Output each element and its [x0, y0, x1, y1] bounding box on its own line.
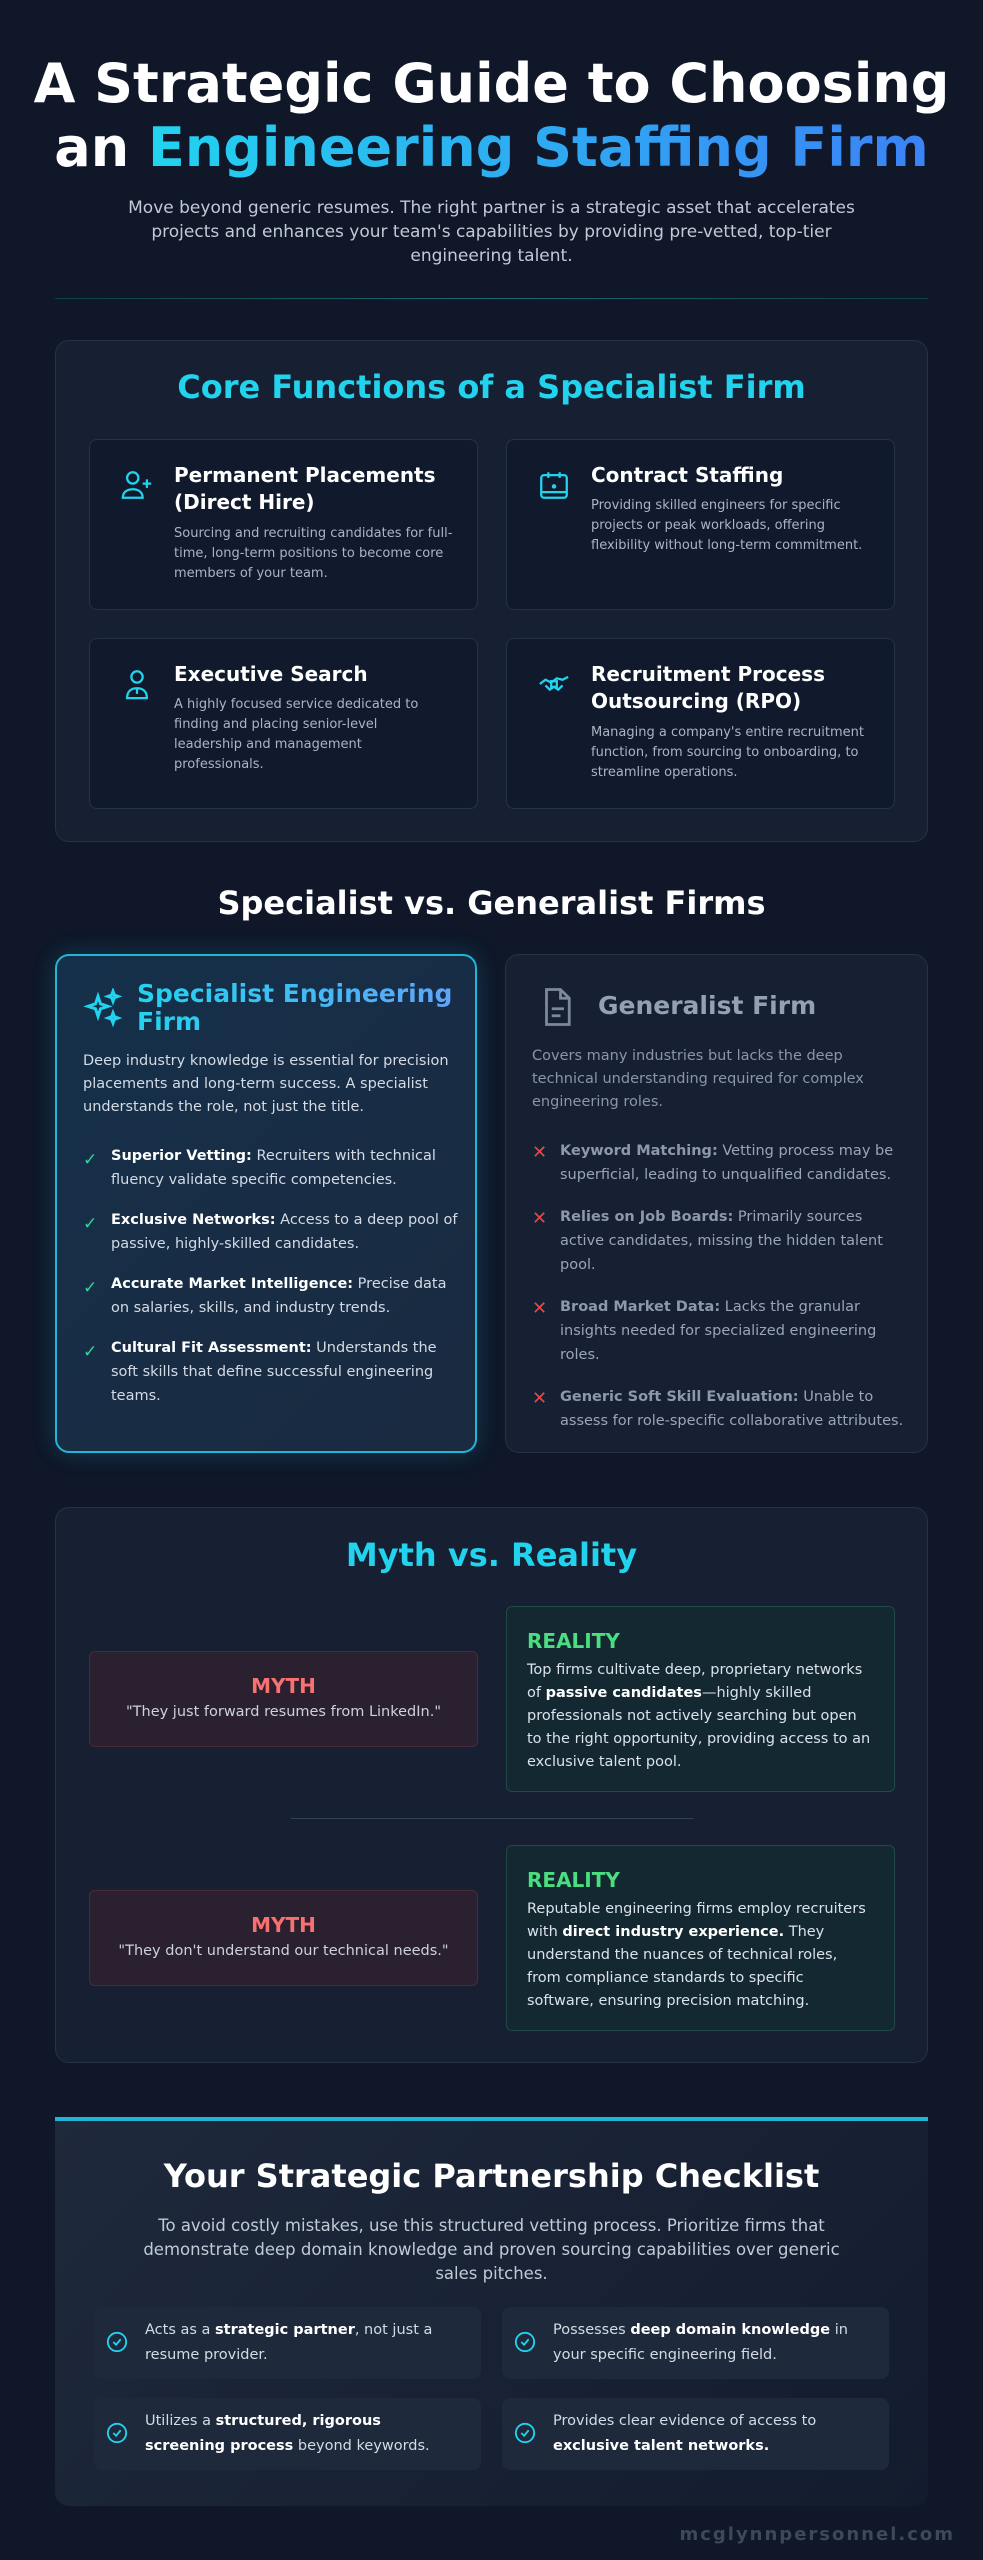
- list: generalist drawbacks: [534, 1143, 903, 1429]
- callout: myth 1: "They just forward resumes from LinkedIn.": [126, 1704, 441, 1720]
- card: executive search: [89, 638, 478, 809]
- heading: specialist: Specialist Engineering: [137, 979, 452, 1008]
- card: RPO: Outsourcing (RPO): [591, 689, 801, 713]
- panel: myth vs reality: [55, 1507, 928, 2063]
- callout: myth 2: "They don't understand our technical needs.": [118, 1943, 449, 1959]
- card: RPO: [506, 638, 895, 809]
- icon: handshake: [539, 676, 569, 692]
- heading: specialist: Firm: [137, 1007, 201, 1036]
- heading: myth vs reality: Myth vs. Reality: [346, 1536, 637, 1574]
- callout: reality 1: Top firms cultivate deep, proprietary networks of passive candidates—highly skilled professionals not actively searching but open to the right opportunity, providing access to an exclusive talent pool.: [527, 1662, 870, 1770]
- callout: myth 1: [89, 1651, 478, 1747]
- card: contract staffing: Providing skilled engineers for specific projects or peak workloads, offering flexibility without long-term commitment.: [591, 498, 862, 553]
- panel: specialist: [55, 954, 477, 1453]
- subtitle: Move beyond generic resumes. The right partner is a strategic asset that accelerates projects and enhances your team's capabilities by providing pre-vetted, top-tier engineering talent.: [128, 198, 855, 266]
- callout: myth 2: [89, 1890, 478, 1986]
- text: generalist intro: Covers many industries but lacks the deep technical understanding required for complex engineering roles.: [532, 1048, 864, 1110]
- list: specialist advantages: Superior Vetting: Recruiters with technical fluency validate specific competencies.: [111, 1148, 436, 1188]
- card: executive search: A highly focused service dedicated to finding and placing senior-level leadership and management professionals.: [174, 697, 418, 772]
- heading: core functions: Core Functions of a Specialist Firm: [177, 368, 806, 406]
- icon: calendar: [540, 472, 568, 499]
- item: strategic partner: [94, 2307, 481, 2379]
- callout: myth 1: MYTH: [251, 1674, 316, 1698]
- heading: specialist vs generalist: Specialist vs. Generalist Firms: [217, 884, 766, 922]
- panel: generalist: [505, 954, 928, 1453]
- title: A Strategic Guide to Choosing: [34, 52, 949, 115]
- card: permanent placements: (Direct Hire): [174, 490, 315, 514]
- list: specialist advantages: Exclusive Networks: Access to a deep pool of passive, highly-skilled candidates.: [111, 1212, 458, 1252]
- item: talent networks: Provides clear evidence of access to exclusive talent networks.: [553, 2413, 816, 2454]
- callout: reality 2: Reputable engineering firms employ recruiters with direct industry experience. They understand the nuances of technical roles, from compliance standards to specific software, ensuring precision matching.: [527, 1901, 866, 2009]
- callout: reality 2: REALITY: [527, 1868, 620, 1892]
- card: RPO: Recruitment Process: [591, 662, 825, 686]
- list: generalist drawbacks: Keyword Matching: Vetting process may be superficial, leading to unqualified candidates.: [560, 1143, 893, 1183]
- callout: myth 2: MYTH: [251, 1913, 316, 1937]
- icon: document: [545, 988, 571, 1026]
- item: domain knowledge: Possesses deep domain knowledge in your specific engineering field.: [553, 2322, 848, 2363]
- callout: reality 1: [506, 1606, 895, 1792]
- card: permanent placements: [89, 439, 478, 610]
- icon: sparkles: [83, 988, 122, 1028]
- heading: generalist: Generalist Firm: [598, 991, 816, 1020]
- item: screening process: Utilizes a structured, rigorous screening process beyond keywords.: [145, 2413, 430, 2454]
- item: domain knowledge: [502, 2307, 889, 2379]
- title: an Engineering Staffing Firm: [54, 116, 929, 179]
- icon: user: [126, 670, 148, 700]
- icon: user plus: [122, 471, 152, 499]
- card: contract staffing: Contract Staffing: [591, 463, 783, 487]
- panel: core functions: [55, 340, 928, 842]
- callout: reality 1: REALITY: [527, 1629, 620, 1653]
- list: specialist advantages: Accurate Market Intelligence: Precise data on salaries, skills, and industry trends.: [111, 1276, 446, 1316]
- card: RPO: Managing a company's entire recruitment function, from sourcing to onboarding, to streamline operations.: [591, 725, 864, 780]
- list: generalist drawbacks: Generic Soft Skill Evaluation: Unable to assess for role-specific collaborative attributes.: [560, 1389, 903, 1429]
- callout: reality 2: [506, 1845, 895, 2031]
- card: permanent placements: Sourcing and recruiting candidates for full-time, long-term positions to become core members of your team.: [174, 526, 452, 581]
- heading: specialist: [137, 980, 452, 1036]
- list: generalist drawbacks: Relies on Job Boards: Primarily sources active candidates, missing the hidden talent pool.: [560, 1209, 883, 1273]
- card: executive search: Executive Search: [174, 662, 368, 686]
- item: screening process: [94, 2398, 481, 2470]
- item: talent networks: [502, 2398, 889, 2470]
- footer: website: mcglynnpersonnel.com: [679, 2524, 955, 2545]
- list: generalist drawbacks: Broad Market Data: Lacks the granular insights needed for specialized engineering roles.: [560, 1299, 876, 1363]
- title: [34, 52, 949, 179]
- text: specialist intro: Deep industry knowledge is essential for precision placements and long-term success. A specialist understands the role, not just the title.: [83, 1053, 449, 1115]
- card: contract staffing: [506, 439, 895, 610]
- item: strategic partner: Acts as a strategic partner, not just a resume provider.: [145, 2322, 432, 2363]
- card: permanent placements: Permanent Placements: [174, 463, 436, 487]
- panel: checklist: [55, 2117, 928, 2506]
- text: checklist intro: To avoid costly mistakes, use this structured vetting process. Prioritize firms that demonstrate deep domain knowledge and proven sourcing capabilities over generic sales pitches.: [143, 2216, 840, 2283]
- list: specialist advantages: Cultural Fit Assessment: Understands the soft skills that define successful engineering teams.: [111, 1340, 437, 1404]
- list: specialist advantages: [86, 1148, 458, 1404]
- heading: checklist: Your Strategic Partnership Checklist: [164, 2157, 819, 2195]
